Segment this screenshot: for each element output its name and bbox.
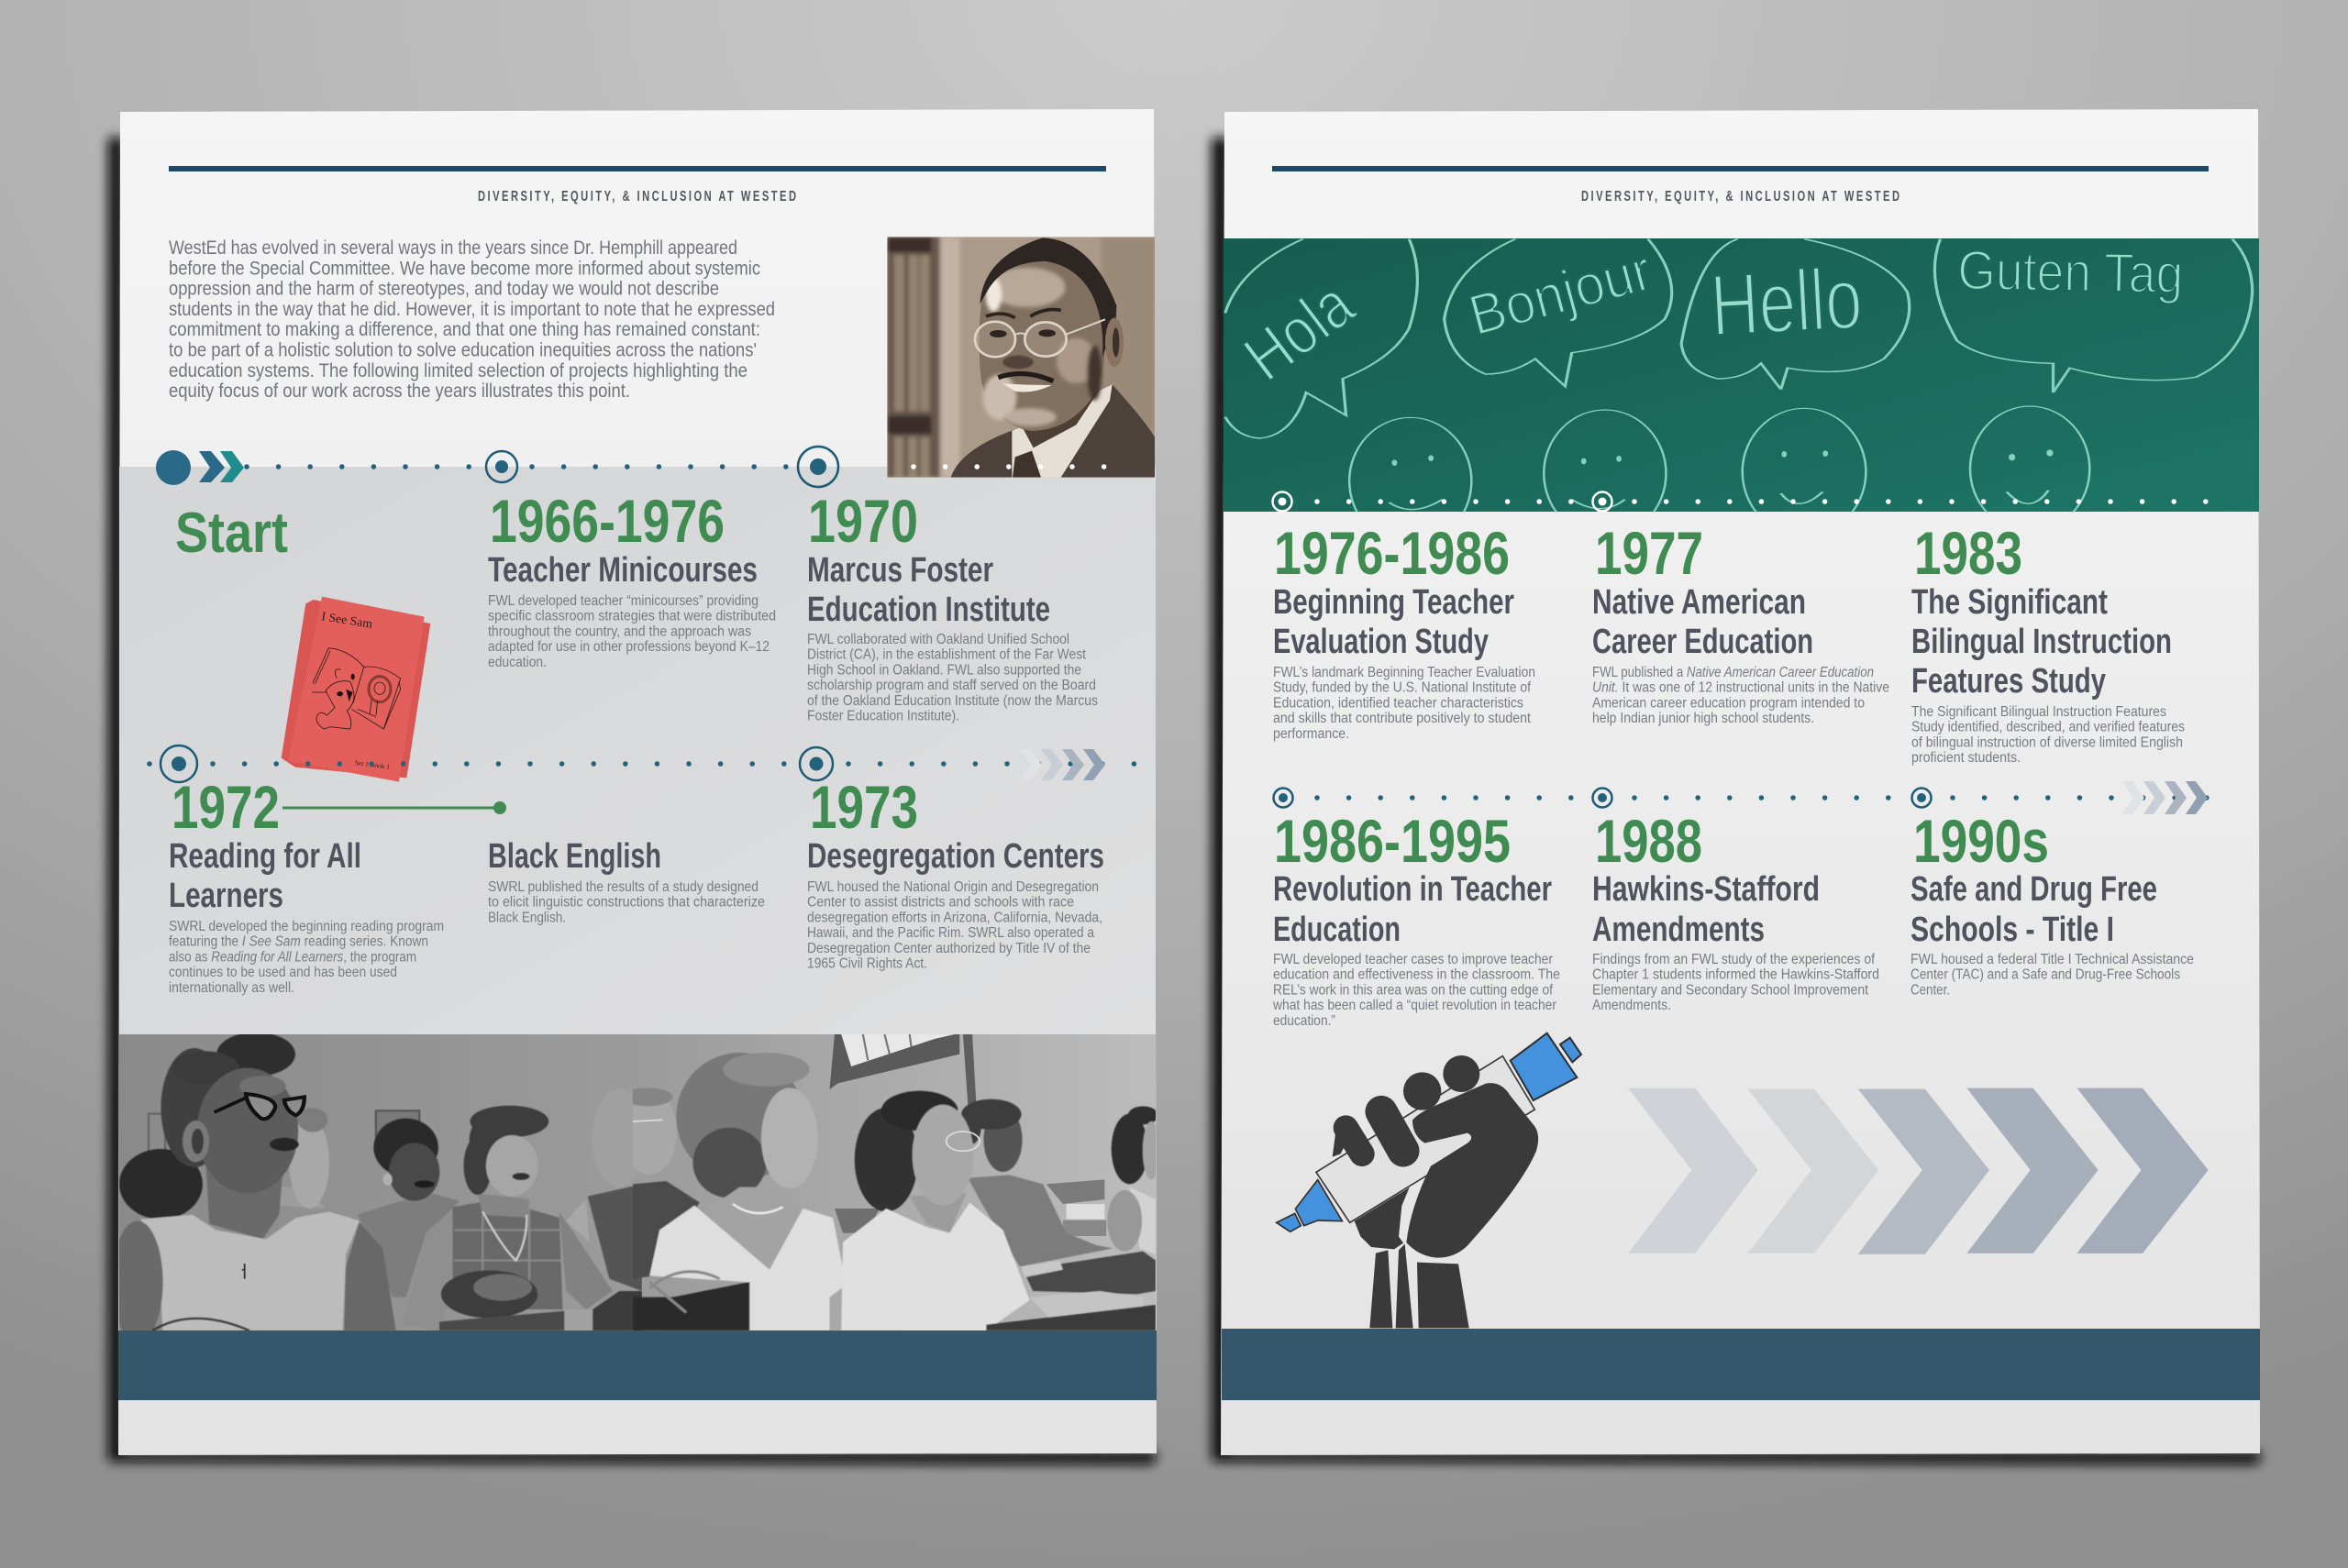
footer band xyxy=(1222,1329,2260,1400)
entry 1970: Marcus Foster xyxy=(807,551,993,590)
entry 1973: 1965 Civil Rights Act. xyxy=(807,955,927,972)
start chevrons xyxy=(199,451,244,482)
entry Black English: Black English. xyxy=(488,910,566,925)
entry 1970: of the Oakland Education Institute (now the Marcus xyxy=(807,693,1098,709)
icon: fist holding marker xyxy=(1277,1033,1581,1328)
entry 1972: also as Reading for All Learners, the program xyxy=(169,949,416,965)
marker 1973 xyxy=(800,747,833,780)
page shadows xyxy=(108,138,2262,1464)
entry 1983: Features Study xyxy=(1911,662,2106,701)
connector line xyxy=(282,801,506,814)
chalk word Hello: Hello xyxy=(1709,249,1865,355)
panel: right page xyxy=(1221,109,2260,1455)
Start label: Start xyxy=(175,502,288,565)
entry 1977: Career Education xyxy=(1592,623,1813,661)
entry 1983 xyxy=(1911,519,2185,766)
footer band xyxy=(118,1331,1157,1400)
marker 1986 xyxy=(1273,789,1293,807)
entry 1966-1976: FWL developed teacher “minicourses” providing xyxy=(488,593,759,609)
intro paragraph: oppression and the harm of stereotypes, and today we would not describe xyxy=(169,279,719,300)
intro paragraph: WestEd has evolved in several ways in the years since Dr. Hemphill appeared xyxy=(169,237,737,259)
panel: left page xyxy=(112,109,1160,1455)
entry 1973: Desegregation Center authorized by Title IV of the xyxy=(807,941,1091,956)
entry 1977: Native American xyxy=(1592,583,1806,622)
entry Black English: Black English xyxy=(488,837,661,876)
entry 1973: FWL housed the National Origin and Desegregation xyxy=(807,879,1099,895)
entry 1986-1995: education.” xyxy=(1273,1013,1335,1029)
entry 1983: Bilingual Instruction xyxy=(1911,623,2172,661)
entry 1970: Education Institute xyxy=(807,591,1050,629)
entry 1970: FWL collaborated with Oakland Unified School xyxy=(807,632,1069,647)
entry 1973: 1973 xyxy=(810,773,918,841)
timeline row 3 xyxy=(1273,491,2210,512)
entry 1972: internationally as well. xyxy=(169,980,294,996)
entry 1983: The Significant Bilingual Instruction Features xyxy=(1911,704,2166,720)
entry 1972: Reading for All xyxy=(169,837,361,876)
entry 1966-1976: throughout the country, and the approach was xyxy=(488,624,751,639)
intro paragraph: education systems. The following limited selection of projects highlighting the xyxy=(169,360,748,381)
marker tail xyxy=(1511,1033,1577,1100)
entry 1966-1976: education. xyxy=(488,655,547,670)
entry 1986-1995 xyxy=(1272,807,1560,1029)
entry 1970: scholarship program and staff served on the Board xyxy=(807,678,1096,693)
marker 1977 xyxy=(1592,491,1612,512)
entry Black English xyxy=(488,837,765,925)
marker 1970 xyxy=(798,447,838,487)
face xyxy=(979,259,1105,431)
entry 1988: 1988 xyxy=(1595,807,1702,875)
intro paragraph: students in the way that he did. However, it is important to note that he expressed xyxy=(169,299,775,320)
entry 1990s: Schools - Title I xyxy=(1911,911,2114,949)
entry 1983: 1983 xyxy=(1914,519,2022,587)
entry 1990s: FWL housed a federal Title I Technical Assistance xyxy=(1911,952,2194,967)
photo: classroom of students xyxy=(112,1032,1160,1343)
entry 1972 xyxy=(169,773,506,996)
header rule xyxy=(1272,166,2209,171)
marker 1972 xyxy=(161,745,197,782)
students, right half xyxy=(622,1034,1160,1331)
entry 1986-1995: what has been called a “quiet revolution in teacher xyxy=(1272,998,1556,1013)
marker tip xyxy=(1295,1180,1342,1226)
entry 1973: desegregation efforts in Arizona, California, Nevada, xyxy=(807,910,1102,925)
start dot xyxy=(156,450,191,485)
entry 1986-1995: 1986-1995 xyxy=(1274,807,1511,875)
entry 1973: Center to assist districts and schools with race xyxy=(807,895,1074,911)
entry 1972: SWRL developed the beginning reading program xyxy=(169,919,444,934)
small chevrons xyxy=(1020,749,1105,780)
entry 1966-1976: adapted for use in other professions beyond K–12 xyxy=(488,639,770,655)
entry 1986-1995: Revolution in Teacher xyxy=(1273,870,1552,909)
entry 1983: Study identified, described, and verified features xyxy=(1911,720,2185,735)
grey timeline panel xyxy=(119,467,1156,1034)
intro paragraph xyxy=(169,237,775,402)
entry 1970: District (CA), in the establishment of the Far West xyxy=(807,647,1087,663)
entry 1988: Findings from an FWL study of the experiences of xyxy=(1592,952,1876,967)
entry 1990s: Safe and Drug Free xyxy=(1911,870,2157,909)
entry 1976-1986 xyxy=(1273,519,1535,742)
entry 1976-1986: Study, funded by the U.S. National Institute of xyxy=(1273,680,1532,696)
entry 1973 xyxy=(807,773,1104,972)
entry 1988: Elementary and Secondary School Improvement xyxy=(1592,982,1869,998)
entry Black English: SWRL published the results of a study designed xyxy=(488,879,759,895)
entry 1966-1976: 1966-1976 xyxy=(490,487,725,555)
entry 1990s: Center (TAC) and a Safe and Drug-Free Schools xyxy=(1911,967,2180,983)
students, left half xyxy=(112,1032,647,1343)
entry 1983: of bilingual instruction of diverse limited English xyxy=(1911,734,2183,750)
entry 1970 xyxy=(807,487,1098,724)
hair xyxy=(980,237,1116,358)
entry 1988 xyxy=(1592,807,1879,1013)
entry 1977: help Indian junior high school students. xyxy=(1592,711,1814,726)
image: I See Sam book: Set 1 Book 1 xyxy=(354,758,391,771)
entry 1976-1986: performance. xyxy=(1273,726,1349,742)
entry 1976-1986: Evaluation Study xyxy=(1273,623,1489,661)
entry 1977: FWL published a Native American Career Education xyxy=(1592,665,1874,680)
entry Black English: to elicit linguistic constructions that characterize xyxy=(488,895,765,911)
timeline row 4 xyxy=(1273,781,2210,814)
photo: chalkboard greetings xyxy=(1224,238,2259,513)
entry 1988: Amendments. xyxy=(1592,998,1671,1013)
entry 1970: 1970 xyxy=(808,487,918,555)
intro paragraph: commitment to making a difference, and that one thing has remained constant: xyxy=(169,319,760,340)
running header: DIVERSITY, EQUITY, & INCLUSION AT WESTED xyxy=(1581,188,1899,204)
entry 1973: Desegregation Centers xyxy=(807,837,1104,876)
entry 1988: Hawkins-Stafford xyxy=(1592,870,1820,909)
fingers and palm xyxy=(1333,1055,1538,1258)
chalk word Hola: Hola xyxy=(1231,267,1368,395)
entry 1966-1976 xyxy=(488,487,776,670)
entry 1976-1986: and skills that contribute positively to student xyxy=(1273,711,1532,726)
entry 1970: High School in Oakland. FWL also supported the xyxy=(807,662,1081,678)
entry 1972: Learners xyxy=(169,877,283,915)
photo: portrait of Dr. Hemphill xyxy=(887,237,1155,478)
marker 1976 xyxy=(1273,491,1291,512)
entry 1972: 1972 xyxy=(172,773,280,841)
entry 1990s: 1990s xyxy=(1913,807,2049,875)
timeline row 2 xyxy=(147,745,1137,782)
entry 1990s xyxy=(1911,807,2194,998)
entry 1977: Unit. It was one of 12 instructional units in the Native xyxy=(1592,680,1889,696)
image: I See Sam book xyxy=(282,597,430,782)
chalk word Guten Tag: Guten Tag xyxy=(1957,239,2184,304)
entry 1977: American career education program intended to xyxy=(1592,695,1865,711)
timeline row 1 xyxy=(156,447,1110,487)
entry 1986-1995: education and effectiveness in the classroom. The xyxy=(1273,967,1560,983)
entry 1973: Hawaii, and the Pacific Rim. SWRL also operated a xyxy=(807,925,1094,941)
cat-eye glasses xyxy=(246,1094,305,1119)
entry 1976-1986: FWL’s landmark Beginning Teacher Evaluation xyxy=(1273,665,1535,680)
entry 1986-1995: Education xyxy=(1273,911,1401,949)
entry 1966-1976: specific classroom strategies that were distributed xyxy=(488,609,776,624)
entry 1983: proficient students. xyxy=(1911,750,2021,766)
intro paragraph: equity focus of our work across the years illustrates this point. xyxy=(169,381,630,402)
running header: DIVERSITY, EQUITY, & INCLUSION AT WESTED xyxy=(478,188,796,204)
marker body xyxy=(1316,1056,1534,1222)
entry 1966-1976: Teacher Minicourses xyxy=(488,551,758,590)
right page sheet xyxy=(1221,109,2260,1455)
chalk word Bonjour: Bonjour xyxy=(1463,239,1658,348)
marker 1990s xyxy=(1911,789,1932,807)
entry 1972: featuring the I See Sam reading series. Known xyxy=(169,934,428,950)
header rule xyxy=(169,166,1106,171)
large chevrons xyxy=(1628,1088,2209,1254)
entry 1972: continues to be used and has been used xyxy=(169,965,397,980)
entry 1986-1995: REL’s work in this area was on the cutting edge of xyxy=(1273,982,1554,998)
entry 1977 xyxy=(1592,519,1889,726)
marker 1988 xyxy=(1592,789,1612,807)
entry 1990s: Center. xyxy=(1911,982,1950,998)
entry 1977: 1977 xyxy=(1595,519,1703,587)
entry 1976-1986: Beginning Teacher xyxy=(1273,583,1514,622)
entry 1970: Foster Education Institute). xyxy=(807,708,959,724)
entry 1988: Chapter 1 students informed the Hawkins-Stafford xyxy=(1592,967,1879,983)
entry 1976-1986: 1976-1986 xyxy=(1274,519,1510,587)
entry 1983: The Significant xyxy=(1911,583,2108,622)
image: I See Sam book: I See Sam xyxy=(321,609,374,631)
entry 1976-1986: Education, identified teacher characteristics xyxy=(1273,695,1523,711)
marker 1966 xyxy=(486,451,517,482)
intro paragraph: to be part of a holistic solution to solve education inequities across the nations' xyxy=(169,339,757,361)
entry 1986-1995: FWL developed teacher cases to improve teacher xyxy=(1273,952,1553,967)
entry 1988: Amendments xyxy=(1592,911,1765,949)
forearm xyxy=(1369,1244,1469,1328)
intro paragraph: before the Special Committee. We have become more informed about systemic xyxy=(169,258,760,279)
small chevrons xyxy=(2122,781,2208,814)
left page sheet xyxy=(118,109,1157,1455)
